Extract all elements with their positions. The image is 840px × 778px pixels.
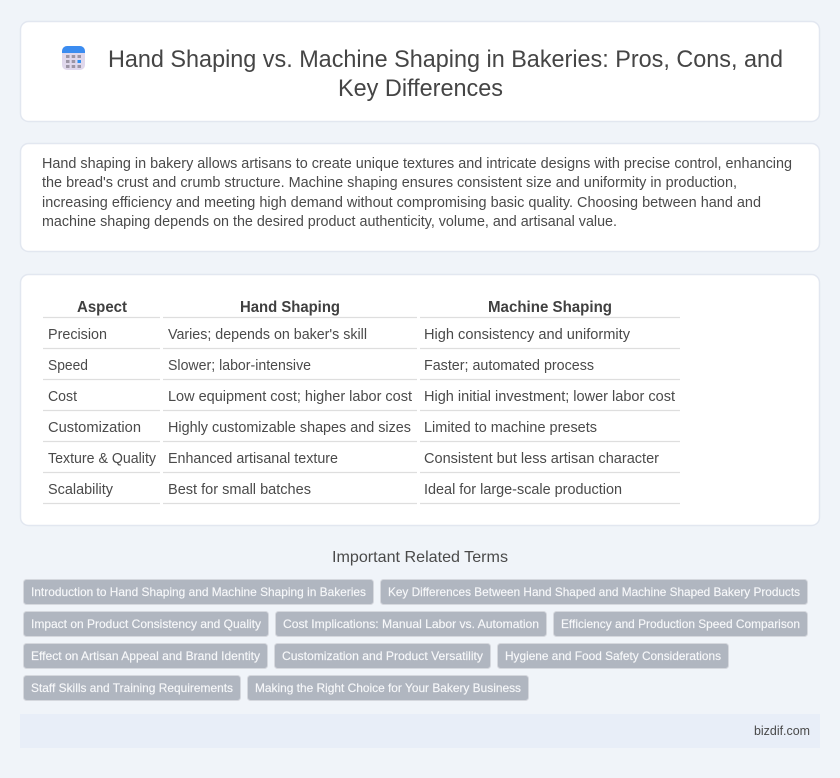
- row: scalability: [48, 482, 622, 498]
- row: speed: Speed: [48, 358, 88, 374]
- panel: introduction text: Hand shaping in bakery allows artisans to create unique textures and intricate designs with precise control, enhancing: [42, 156, 792, 172]
- tag: [24, 580, 374, 604]
- title: Key Differences: [338, 75, 503, 102]
- tag: Hygiene and Food Safety Considerations: [505, 649, 721, 663]
- row: customization: Highly customizable shapes and sizes: [168, 420, 411, 436]
- tag: [24, 612, 268, 636]
- tag: Staff Skills and Training Requirements: [31, 681, 233, 695]
- table header row: Hand Shaping: [240, 299, 340, 316]
- row: customization: [48, 420, 597, 436]
- tag: Cost Implications: Manual Labor vs. Automation: [283, 617, 539, 631]
- tag: [248, 676, 528, 700]
- tag: Customization and Product Versatility: [282, 649, 483, 663]
- row: customization: Limited to machine presets: [424, 420, 597, 436]
- icon: calendar: [62, 46, 85, 70]
- row: texture and quality: Consistent but less artisan character: [424, 451, 659, 467]
- header panel: [20, 22, 820, 122]
- row: speed: Faster; automated process: [424, 358, 594, 374]
- tag: [380, 580, 808, 604]
- table header row: Machine Shaping: [488, 299, 612, 316]
- tag: Effect on Artisan Appeal and Brand Identity: [31, 649, 260, 663]
- row: precision: Precision: [48, 327, 107, 343]
- row: texture and quality: Enhanced artisanal texture: [168, 451, 338, 467]
- panel: introduction text: increasing efficiency and meeting high demand without compromising basic quality. Choosing between hand and: [42, 195, 761, 211]
- tag: Efficiency and Production Speed Comparison: [561, 617, 800, 631]
- title: Hand Shaping vs. Machine Shaping in Bakeries: Pros, Cons, and: [108, 46, 783, 73]
- row: speed: [48, 358, 594, 374]
- tag: Key Differences Between Hand Shaped and Machine Shaped Bakery Products: [388, 585, 800, 599]
- panel: comparison table: [20, 274, 820, 526]
- table header row: Aspect: [77, 299, 128, 316]
- tag: [274, 644, 490, 668]
- row: cost: [48, 389, 675, 405]
- tag: Making the Right Choice for Your Bakery Business: [255, 681, 521, 695]
- row: precision: High consistency and uniformity: [424, 327, 631, 343]
- row: precision: [48, 327, 631, 343]
- related term tags: [24, 580, 808, 700]
- tag: [276, 612, 546, 636]
- row: speed: Slower; labor-intensive: [168, 358, 311, 374]
- row: cost: Low equipment cost; higher labor cost: [168, 389, 412, 405]
- row: customization: Customization: [48, 420, 141, 436]
- footer: bizdif.com: [754, 724, 810, 738]
- panel: introduction text: machine shaping depends on the desired product authenticity, volume, and artisanal value.: [42, 214, 617, 230]
- title: [108, 46, 783, 102]
- panel: introduction text: [20, 144, 820, 252]
- tag: Introduction to Hand Shaping and Machine Shaping in Bakeries: [31, 585, 366, 599]
- tag: [498, 644, 728, 668]
- row: cost: Cost: [48, 389, 77, 405]
- tag: [554, 612, 808, 636]
- footer: [20, 714, 820, 748]
- row: cost: High initial investment; lower labor cost: [424, 389, 675, 405]
- tag: [24, 644, 268, 668]
- table header row: [77, 299, 612, 316]
- tag: Impact on Product Consistency and Quality: [31, 617, 261, 631]
- row: scalability: Ideal for large-scale production: [424, 482, 622, 498]
- heading: important related terms: Important Related Terms: [332, 549, 508, 566]
- row: precision: Varies; depends on baker's skill: [168, 327, 367, 343]
- row: scalability: Scalability: [48, 482, 114, 498]
- panel: introduction text: the bread's crust and crumb structure. Machine shaping ensures consistent size and uniformity in production,: [42, 175, 737, 191]
- row: scalability: Best for small batches: [168, 482, 311, 498]
- tag: [24, 676, 240, 700]
- row: texture and quality: Texture & Quality: [48, 451, 157, 467]
- row: texture and quality: [48, 451, 659, 467]
